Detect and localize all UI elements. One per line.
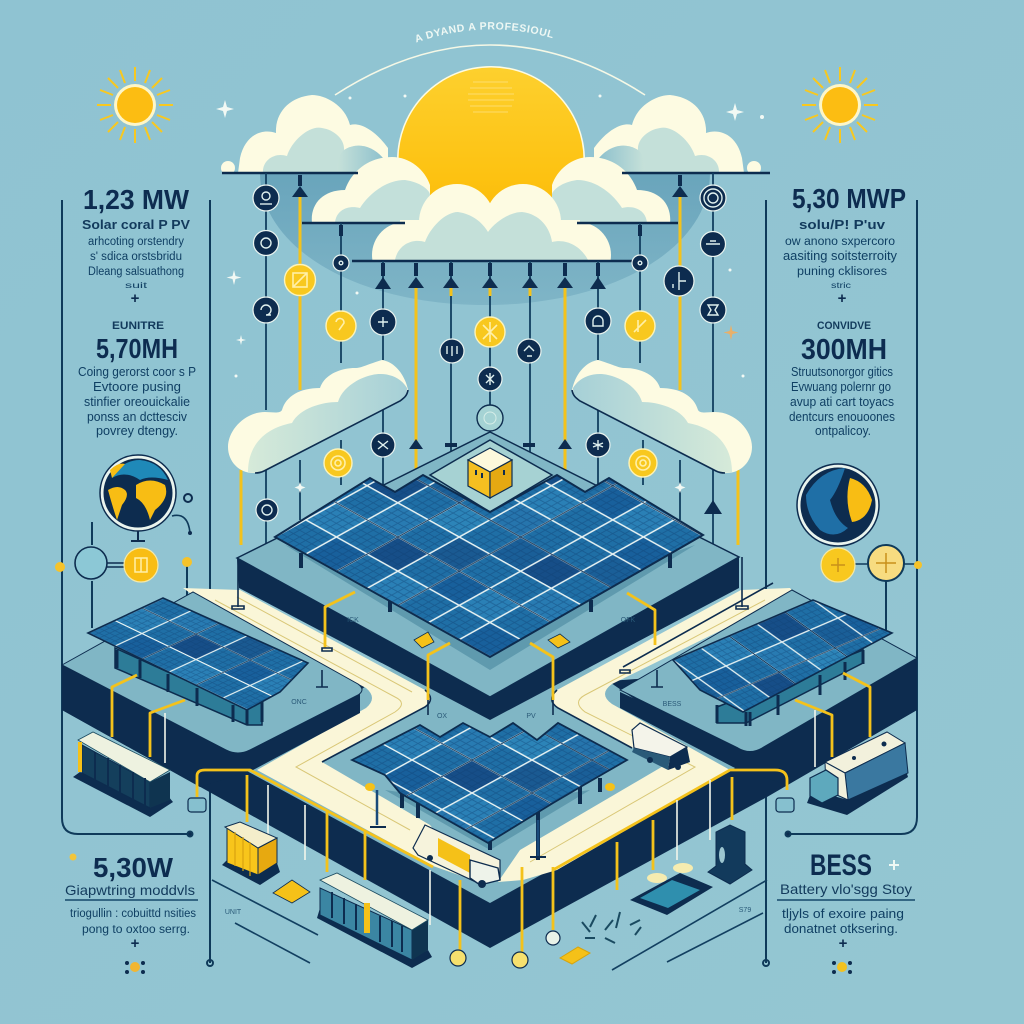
white service lines [165,710,815,925]
cloud support bars [222,173,770,261]
right text block: 5,30 MWP: 5,30 MWP [792,183,906,214]
right text block: 300MH: dentcurs enouoones [789,410,895,424]
right text block: 300MH: Struutsonorgor gitics [791,365,893,379]
platform micro labels: BESS [663,701,682,708]
right bottom text block [777,849,915,974]
globe right connector nodes [821,545,922,582]
platform micro labels: PV [526,713,536,720]
left text block: 5,70MH: ponss an dcttesciv [87,410,188,424]
right text block: 5,30 MWP: ow anono sxpercoro [785,236,895,248]
bottom inverter unit [630,863,713,915]
platform micro labels: S79 [739,907,751,914]
left bottom text block: 5,30W [93,852,174,883]
platform micro labels: OX [437,713,447,720]
globe left [100,455,176,541]
left battery rack [73,732,173,817]
cloud middle right [552,157,670,223]
base platform top [245,600,735,903]
yellow container [222,822,280,885]
globe left connector nodes [55,494,192,582]
platform micro labels: ONC [291,699,307,706]
right low cloud [572,360,752,473]
right cream access road [498,588,795,882]
small sparkle stars [216,94,764,493]
right text block: 5,30 MWP: + [838,290,847,307]
platform micro labels: ICK [347,617,359,624]
left side panel frame lines [62,200,213,966]
right platform [620,590,917,785]
infographic canvas [55,22,922,974]
lower solar array [352,723,627,860]
platform micro labels: UNIT [225,909,242,916]
left platform [62,592,362,787]
left low cloud [228,360,408,473]
left bottom text block: Giapwtring moddvls [65,882,195,898]
bottom battery rack [317,873,432,968]
right text block: 300MH: Evwuang polernr go [791,380,891,394]
bottom tower box [708,825,752,884]
left bottom text block [65,852,198,974]
cloud middle left [312,157,430,223]
truck lower yellow [413,825,500,888]
right text block: 300MH: 300MH [801,334,887,366]
main platform [237,432,739,720]
title arc [334,22,646,96]
left text block: 5,70MH: EUNITRE [112,320,164,332]
right bottom text block: BESS [810,849,872,882]
left text block: 5,70MH: povrey dtengy. [96,424,178,438]
right bottom text block: + [839,935,848,952]
clouds top right [592,95,761,175]
left text block: 1,23 MW: suit [125,281,148,290]
connector stubs [300,175,680,276]
dumbbell connector markers [443,443,537,483]
globe right [797,464,879,546]
icon glyph details [260,189,722,515]
truck middle right [632,723,690,770]
left text block: 1,23 MW: Dleang salsuathong [88,266,184,278]
left solar array [88,598,308,725]
yellow discs at cable ends [450,931,560,968]
right text block: 5,30 MWP: solu/P! P'uv [799,217,886,232]
right text block: 300MH [789,320,895,438]
title text: A DYAND A PROFESIOUL [416,22,552,42]
left text block: 5,70MH [78,320,196,438]
right text block: 5,30 MWP [783,183,906,307]
left text block: 1,23 MW: s' sdica orstsbridu [90,251,182,263]
small orange sparkle [724,325,738,340]
small sun right [802,67,878,143]
large sun [397,66,585,254]
arrow heads row [292,186,722,514]
right text block: 300MH: avup ati cart toyacs [790,395,894,409]
left bottom text block: pong to oxtoo serrg. [82,924,190,936]
left text block: 1,23 MW: arhcoting orstendry [88,236,184,248]
right text block: 5,30 MWP: stric [831,281,851,290]
left text block: 5,70MH: Coing gerorst coor s P [78,365,196,379]
small can boxes [188,798,794,812]
site tools cluster [560,912,641,964]
yellow power cables [112,592,870,953]
right text block: 5,30 MWP: aasiting soitsterroity [783,249,898,263]
right side panel frame lines [763,200,917,966]
base platform wall [62,658,917,948]
mini yellow markers on platform [414,632,570,648]
yellow stack small [273,880,310,903]
right battery unit [807,732,908,815]
rooftop control box [468,448,512,498]
left cream access road [183,588,473,880]
connector lines dark [266,173,713,560]
left text block: 1,23 MW: Solar coral P PV [82,217,190,232]
right bottom text block: Battery vlo'sgg Stoy [780,881,912,897]
teal circle icon [477,405,503,431]
platform micro labels [225,617,751,916]
connector lines yellow [241,193,738,545]
sky shadow under clouds [260,173,710,305]
left bottom text block: triogullin : cobuittd nsities [70,908,196,920]
right text block: 5,30 MWP: puning cklisores [797,266,887,278]
ground marking lines [212,880,767,970]
left text block: 5,70MH: stinfier oreouickalie [84,395,190,409]
right bottom text block: donatnet otksering. [784,922,898,936]
cloud centre [372,184,611,260]
main solar array [275,475,703,670]
left text block: 5,70MH: 5,70MH [96,333,178,364]
clouds top left [221,95,390,175]
lamp posts on lower island [365,783,615,857]
platform micro labels: OFK [621,617,636,624]
left text block: 1,23 MW [82,184,190,307]
right text block: 300MH: CONVIDVE [817,320,871,332]
right bottom text block: tljyls of exoire paing [782,907,904,921]
left text block: 5,70MH: Evtoore pusing [93,380,181,394]
yellow circle icons [284,264,657,477]
right text block: 300MH: ontpalicoy. [815,424,871,438]
yellow icon glyphs [293,273,650,470]
right solar array [673,600,892,726]
small sun left [97,67,173,143]
dark cable lines [232,557,773,715]
dark circle icons [253,185,726,521]
left bottom text block: + [131,935,140,952]
left text block: 1,23 MW: 1,23 MW [83,184,190,215]
left text block: 1,23 MW: + [131,290,140,307]
